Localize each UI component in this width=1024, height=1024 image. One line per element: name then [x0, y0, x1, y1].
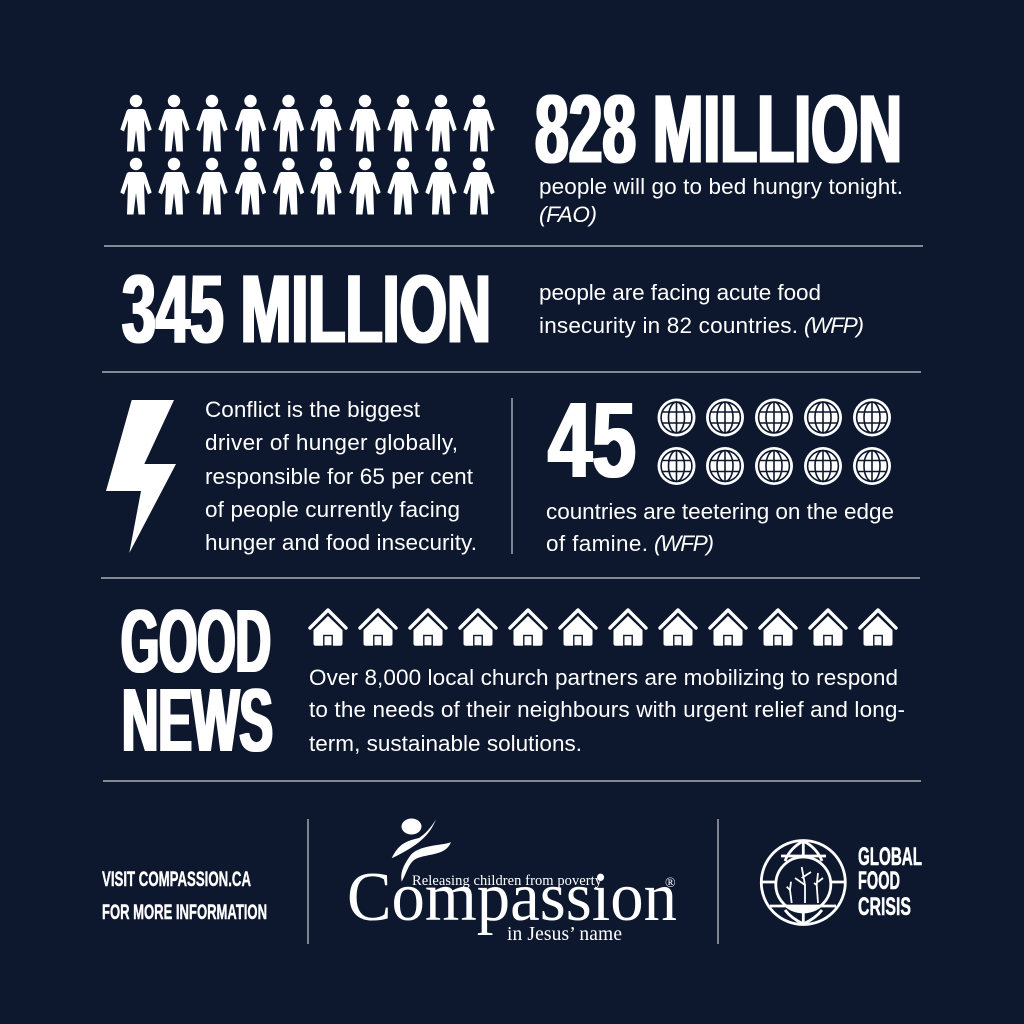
- text: conflict: responsible for 65 per cent: [205, 464, 474, 489]
- text: acute food insecurity: people are facing acute food: [539, 280, 821, 305]
- text: countries on the edge of famine: [546, 499, 894, 556]
- call to action: FOR MORE INFORMATION: [102, 901, 267, 924]
- text: countries on the edge of famine: (WFP): [654, 531, 714, 556]
- globe icons: [658, 398, 891, 485]
- source: FAO: (FAO): [539, 202, 597, 227]
- text: conflict: Conflict is the biggest: [205, 397, 421, 422]
- logo: Compassion: Releasing children from poverty: [412, 873, 603, 889]
- text: acute food insecurity: (WFP): [804, 313, 864, 338]
- logo: Compassion: Compassion: [347, 859, 677, 936]
- text: people go to bed hungry: people will go to bed hungry tonight.: [539, 174, 903, 199]
- text: global food crisis: GLOBAL: [858, 843, 922, 871]
- number: 45: 45: [548, 379, 636, 500]
- text: conflict: [205, 397, 477, 555]
- text: countries on the edge of famine: countries are teetering on the edge: [546, 499, 894, 524]
- text: acute food insecurity: [539, 280, 864, 338]
- text: local church partners: [309, 665, 905, 756]
- heading: good news: GOOD: [121, 592, 271, 692]
- text: countries on the edge of famine: of famine.: [546, 531, 648, 556]
- heading: good news: [121, 592, 273, 771]
- text: local church partners: Over 8,000 local church partners are mobilizing to respond: [309, 665, 898, 690]
- logo: Compassion: in Jesus’ name: [507, 924, 622, 945]
- text: local church partners: term, sustainable solutions.: [309, 731, 582, 756]
- logo: global food crisis globe: [761, 840, 845, 924]
- text: conflict: driver of hunger globally,: [205, 430, 458, 455]
- logo: Compassion: ®: [665, 876, 676, 891]
- text: global food crisis: CRISIS: [858, 893, 911, 921]
- text: acute food insecurity: insecurity in 82 countries.: [539, 313, 798, 338]
- heading: good news: NEWS: [122, 671, 273, 771]
- text: local church partners: to the needs of their neighbours with urgent relief and long-: [309, 697, 905, 722]
- house icons: [310, 610, 896, 646]
- text: global food crisis: FOOD: [858, 867, 900, 895]
- people icons: [120, 95, 495, 214]
- headline: 345 million: 345 MILLION: [122, 254, 491, 364]
- text: conflict: hunger and food insecurity.: [205, 530, 477, 555]
- call to action: [102, 868, 267, 924]
- logo: Compassion: [347, 818, 677, 945]
- text: conflict: of people currently facing: [205, 497, 460, 522]
- call to action: VISIT COMPASSION.CA: [102, 868, 251, 891]
- icon: lightning bolt: [106, 400, 176, 553]
- text: global food crisis: [858, 843, 922, 921]
